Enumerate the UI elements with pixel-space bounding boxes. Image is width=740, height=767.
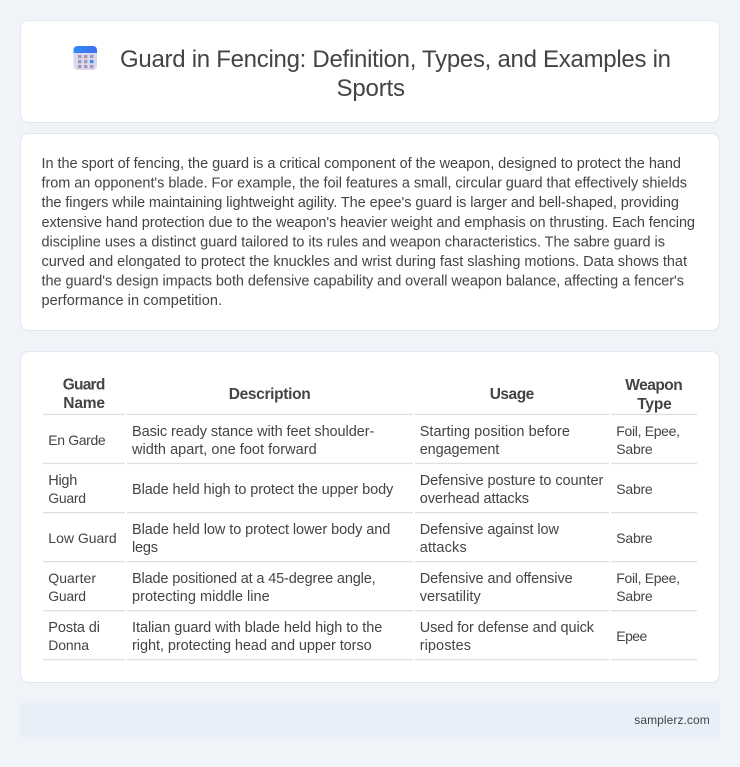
table row: High Guard: Guard bbox=[48, 490, 86, 506]
footer bbox=[20, 703, 720, 737]
table header: Name bbox=[63, 395, 105, 412]
table header: Guard bbox=[63, 376, 105, 394]
table row: Posta di Donna bbox=[48, 620, 648, 654]
text block: intro paragraph: the guard's design impacts both defensive capability and overall weapon balance, affecting a fencer's bbox=[42, 274, 684, 290]
panel: guard table bbox=[20, 352, 720, 682]
table row: Low Guard: legs bbox=[132, 540, 158, 556]
table row: En Garde: Basic ready stance with feet shoulder- bbox=[132, 424, 374, 440]
table row: En Garde bbox=[48, 423, 680, 458]
table row: Posta di Donna: Italian guard with blade held high to the bbox=[132, 620, 382, 636]
text block: intro paragraph: In the sport of fencing, the guard is a critical component of the weapon, designed to protect the hand bbox=[42, 156, 681, 172]
table row: En Garde: engagement bbox=[420, 442, 499, 458]
table row: Low Guard: Blade held low to protect lower body and bbox=[132, 522, 390, 538]
table row: En Garde: Sabre bbox=[616, 441, 653, 457]
table row: En Garde: Foil, Epee, bbox=[616, 423, 680, 439]
table row: High Guard: High bbox=[48, 473, 77, 489]
table row: Low Guard: Low Guard bbox=[48, 530, 117, 546]
table row: Quarter Guard: protecting middle line bbox=[132, 589, 270, 605]
text block: intro paragraph: discipline uses a distinct guard tailored to its rules and weapon characteristics. The sabre guard is bbox=[42, 234, 665, 250]
table row: Posta di Donna: right, protecting head and upper torso bbox=[132, 638, 372, 654]
text block: intro paragraph: extensive hand protection due to the weapon's heavier weight and emphasis on thrusting. Each fencing bbox=[42, 215, 695, 231]
table row: Quarter Guard bbox=[48, 570, 680, 605]
table row: Quarter Guard: Sabre bbox=[616, 588, 653, 604]
table row: Quarter Guard: Guard bbox=[48, 588, 86, 604]
table row: High Guard: overhead attacks bbox=[420, 491, 529, 507]
table row: Quarter Guard: Quarter bbox=[48, 570, 96, 586]
table row: Low Guard: attacks bbox=[420, 540, 467, 556]
table row: En Garde: width apart, one foot forward bbox=[131, 442, 317, 458]
text block: intro paragraph: the fingers while maintaining lightweight agility. The epee's guard is larger and bell-shaped, providing bbox=[42, 195, 679, 211]
table header: Usage bbox=[490, 386, 535, 403]
table row: En Garde: En Garde bbox=[48, 432, 106, 448]
panel: title card bbox=[20, 20, 720, 122]
text block: intro paragraph bbox=[42, 156, 695, 309]
title: Guard in Fencing: Definition, Types, and Examples in bbox=[120, 46, 671, 73]
panel: intro text bbox=[20, 134, 720, 330]
table header: Description bbox=[229, 386, 311, 403]
table row: Quarter Guard: Blade positioned at a 45-degree angle, bbox=[132, 571, 376, 587]
table row: High Guard: Sabre bbox=[616, 481, 653, 497]
table row: Posta di Donna: Donna bbox=[48, 637, 89, 653]
table row: Posta di Donna: ripostes bbox=[420, 638, 471, 654]
table row: Low Guard bbox=[48, 522, 653, 556]
table header bbox=[63, 376, 683, 413]
table row: Low Guard: Sabre bbox=[616, 530, 653, 546]
table row: Low Guard: Defensive against low bbox=[420, 522, 560, 538]
title: Sports bbox=[336, 75, 405, 102]
icon: calendar bbox=[74, 46, 97, 70]
table row: High Guard bbox=[48, 473, 653, 507]
table row: Posta di Donna: Used for defense and quick bbox=[420, 620, 595, 636]
table row: Quarter Guard: Foil, Epee, bbox=[616, 570, 680, 586]
table row: High Guard: Blade held high to protect the upper body bbox=[132, 482, 394, 498]
table header: Weapon bbox=[625, 377, 683, 394]
table row: High Guard: Defensive posture to counter bbox=[420, 473, 603, 489]
title bbox=[120, 46, 671, 102]
text block: intro paragraph: curved and elongated to protect the knuckles and wrist during fast slashing motions. Data shows that bbox=[42, 254, 687, 270]
footer: samplerz.com bbox=[634, 713, 710, 727]
table row: Posta di Donna: Posta di bbox=[48, 620, 100, 636]
text block: intro paragraph: performance in competition. bbox=[42, 293, 222, 309]
table row: Quarter Guard: versatility bbox=[420, 589, 481, 605]
text block: intro paragraph: from an opponent's blade. For example, the foil features a small, circular guard that effectively shields bbox=[42, 176, 687, 192]
table row: Posta di Donna: Epee bbox=[616, 628, 648, 644]
table row: Quarter Guard: Defensive and offensive bbox=[420, 571, 573, 587]
table header: Type bbox=[637, 396, 672, 413]
table row: En Garde: Starting position before bbox=[420, 424, 570, 440]
